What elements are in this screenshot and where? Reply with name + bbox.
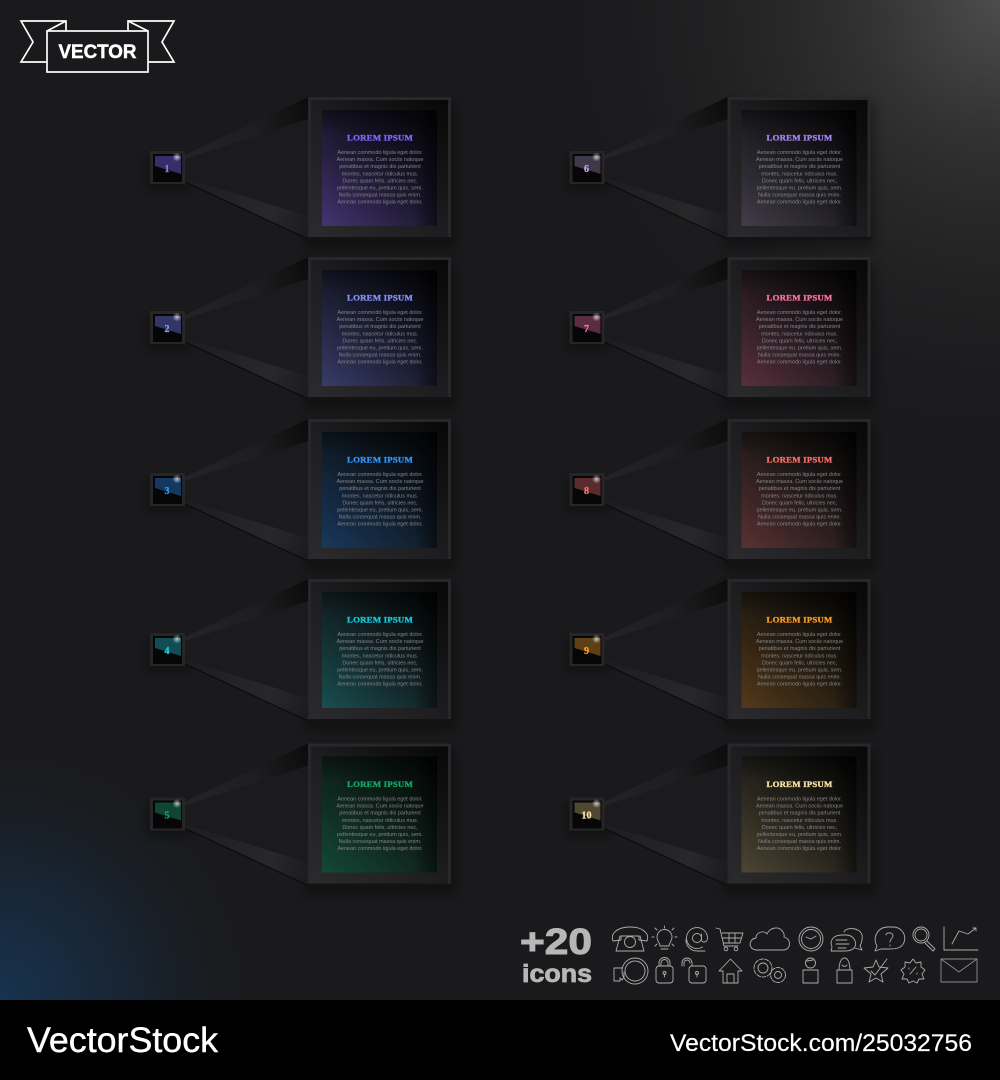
number tile 4	[155, 634, 182, 657]
number tile 3	[155, 474, 182, 497]
badge: vector ribbon	[21, 21, 174, 72]
text block 2: Donec quam felis, ultricies nec,	[342, 338, 418, 344]
text block 10: Nulla consequat massa quis enim.	[758, 839, 841, 845]
text block 4: Nulla consequat massa quis enim.	[339, 675, 422, 681]
text block 6: Aenean commodo ligula eget dolor.	[757, 200, 843, 206]
text block 7: Aenean massa. Cum sociis natoque	[756, 317, 843, 323]
text block 8: montes, nascetur ridiculus mus.	[761, 493, 838, 499]
text block 6: Nulla consequat massa quis enim.	[758, 193, 841, 199]
text block 4: Aenean commodo ligula eget dolor.	[337, 632, 423, 638]
card 3	[146, 419, 456, 571]
card 8	[566, 419, 876, 571]
text block 7: Donec quam felis, ultricies nec,	[762, 338, 838, 344]
icon: question bubble	[875, 927, 905, 951]
icon: envelope	[941, 959, 977, 982]
panel 6	[742, 110, 856, 226]
icon: magnifier	[913, 927, 935, 951]
text block 1: penatibus et magnis dis parturient	[339, 164, 421, 170]
text block 4: Aenean commodo ligula eget dolor.	[337, 682, 423, 688]
number tile 5: 5	[164, 810, 170, 822]
text block 10: Aenean commodo ligula eget dolor.	[757, 846, 843, 852]
text block 4: pellentesque eu, pretium quis, sem.	[337, 668, 423, 674]
text block 3: penatibus et magnis dis parturient	[339, 486, 421, 492]
icon: chat bubbles	[831, 929, 862, 951]
card 2	[146, 257, 456, 409]
text block 2: Nulla consequat massa quis enim.	[339, 353, 422, 359]
icon: open padlock	[682, 958, 706, 983]
footer brand: VectorStock	[27, 1021, 219, 1060]
text block 1: montes, nascetur ridiculus mus.	[342, 171, 419, 177]
text block 10: Aenean massa. Cum sociis natoque	[756, 804, 843, 810]
badge: vector ribbon: VECTOR	[58, 41, 136, 63]
card 6	[566, 97, 876, 249]
number tile 7	[574, 312, 601, 335]
text block 5: Donec quam felis, ultricies nec,	[342, 825, 418, 831]
icon: padlock	[656, 958, 673, 983]
text block 5: Aenean commodo ligula eget dolor.	[337, 846, 423, 852]
panel 7	[742, 270, 856, 386]
text block 5: montes, nascetur ridiculus mus.	[342, 818, 419, 824]
text block 9: Donec quam felis, ultricies nec,	[762, 660, 838, 666]
number tile 5	[155, 799, 182, 822]
number tile 10: 10	[582, 810, 592, 822]
number tile 8: 8	[584, 486, 589, 497]
card 4	[146, 579, 456, 731]
number tile 6	[574, 152, 601, 175]
text block 1: pellentesque eu, pretium quis, sem.	[337, 186, 423, 192]
panel 9	[742, 592, 856, 708]
text block 2: penatibus et magnis dis parturient	[339, 324, 421, 330]
text block 2: pellentesque eu, pretium quis, sem.	[337, 346, 423, 352]
number tile 6: 6	[584, 164, 589, 175]
text block 9: Aenean massa. Cum sociis natoque	[756, 639, 843, 645]
text block 8: pellentesque eu, pretium quis, sem.	[757, 508, 843, 514]
text block 5: Nulla consequat massa quis enim.	[339, 839, 422, 845]
icon: clock	[799, 927, 823, 951]
text block 4: montes, nascetur ridiculus mus.	[342, 653, 419, 659]
text block 7: penatibus et magnis dis parturient	[759, 324, 841, 330]
number tile 7: 7	[584, 324, 589, 335]
icon: woman	[837, 958, 852, 983]
text block 9: penatibus et magnis dis parturient	[759, 646, 841, 652]
text block 7: Nulla consequat massa quis enim.	[758, 353, 841, 359]
text block 3: montes, nascetur ridiculus mus.	[342, 493, 419, 499]
card 7	[566, 257, 876, 409]
text block 10: pellentesque eu, pretium quis, sem.	[757, 832, 843, 838]
text block 9: montes, nascetur ridiculus mus.	[761, 653, 838, 659]
text block 10: Donec quam felis, ultricies nec,	[762, 825, 838, 831]
icon: cloud	[750, 928, 790, 950]
text block 4: penatibus et magnis dis parturient	[339, 646, 421, 652]
text block 6: pellentesque eu, pretium quis, sem.	[757, 186, 843, 192]
icon: man	[803, 958, 818, 983]
text block 9: Nulla consequat massa quis enim.	[758, 675, 841, 681]
icon: percent badge	[901, 959, 925, 983]
text block 6: penatibus et magnis dis parturient	[759, 164, 841, 170]
label: +20 icons	[520, 921, 592, 988]
heading 9: LOREM IPSUM	[767, 614, 833, 624]
panel 3	[322, 432, 437, 548]
text block 8: Aenean massa. Cum sociis natoque	[756, 479, 843, 485]
text block 5: pellentesque eu, pretium quis, sem.	[337, 832, 423, 838]
heading 4: LOREM IPSUM	[347, 614, 413, 624]
text block 1: Nulla consequat massa quis enim.	[339, 193, 422, 199]
icon: telephone	[612, 927, 648, 951]
text block 10: penatibus et magnis dis parturient	[759, 811, 841, 817]
heading 3: LOREM IPSUM	[347, 454, 413, 464]
number tile 2	[155, 312, 182, 335]
card 9	[566, 579, 876, 731]
text block 2: montes, nascetur ridiculus mus.	[342, 331, 419, 337]
number tile 10	[574, 799, 601, 822]
number tile 9: 9	[584, 646, 589, 657]
card 5	[146, 744, 456, 896]
icon: house	[719, 959, 742, 983]
text block 1: Aenean commodo ligula eget dolor.	[337, 200, 423, 206]
footer url: VectorStock.com/25032756	[670, 1030, 972, 1057]
card 10	[566, 744, 876, 896]
text block 7: montes, nascetur ridiculus mus.	[761, 331, 838, 337]
text block 2: Aenean commodo ligula eget dolor.	[337, 310, 423, 316]
icon: line chart	[944, 927, 978, 950]
text block 5: Aenean commodo ligula eget dolor.	[337, 796, 423, 802]
text block 2: Aenean massa. Cum sociis natoque	[336, 317, 424, 323]
heading 8: LOREM IPSUM	[767, 454, 833, 464]
text block 9: Aenean commodo ligula eget dolor.	[757, 682, 843, 688]
panel 5	[322, 756, 437, 872]
panel 2	[322, 270, 437, 386]
text block 7: Aenean commodo ligula eget dolor.	[757, 310, 843, 316]
text block 3: Donec quam felis, ultricies nec,	[342, 500, 418, 506]
footer band	[0, 1000, 1000, 1080]
number tile 8	[574, 474, 601, 497]
text block 6: Aenean commodo ligula eget dolor.	[757, 150, 843, 156]
panel 4	[322, 592, 437, 708]
text block 3: Aenean massa. Cum sociis natoque	[336, 479, 424, 485]
text block 6: Aenean massa. Cum sociis natoque	[756, 157, 843, 163]
text block 6: montes, nascetur ridiculus mus.	[761, 171, 838, 177]
text block 8: Aenean commodo ligula eget dolor.	[757, 522, 843, 528]
text block 1: Donec quam felis, ultricies nec,	[342, 178, 418, 184]
number tile 1	[155, 152, 182, 175]
number tile 2: 2	[164, 324, 170, 335]
icon: key	[614, 958, 648, 984]
heading 6: LOREM IPSUM	[767, 132, 833, 142]
text block 3: Nulla consequat massa quis enim.	[339, 515, 422, 521]
icon: light bulb	[652, 926, 677, 949]
heading 7: LOREM IPSUM	[767, 292, 833, 302]
icon: shopping cart	[716, 928, 743, 951]
heading 1: LOREM IPSUM	[347, 132, 413, 142]
text block 8: Nulla consequat massa quis enim.	[758, 515, 841, 521]
text block 9: Aenean commodo ligula eget dolor.	[757, 632, 843, 638]
panel 8	[742, 432, 856, 548]
number tile 1: 1	[164, 164, 170, 175]
icon: at sign	[686, 928, 708, 951]
text block 1: Aenean commodo ligula eget dolor.	[337, 150, 423, 156]
label: +20 icons: icons	[522, 960, 592, 988]
text block 1: Aenean massa. Cum sociis natoque	[336, 157, 424, 163]
number tile 9	[574, 634, 601, 657]
icon set	[612, 926, 978, 984]
text block 2: Aenean commodo ligula eget dolor.	[337, 360, 423, 366]
heading 10: LOREM IPSUM	[767, 779, 833, 789]
text block 10: montes, nascetur ridiculus mus.	[761, 818, 838, 824]
text block 3: Aenean commodo ligula eget dolor.	[337, 522, 423, 528]
text block 8: Aenean commodo ligula eget dolor.	[757, 472, 843, 478]
text block 9: pellentesque eu, pretium quis, sem.	[757, 668, 843, 674]
text block 10: Aenean commodo ligula eget dolor.	[757, 796, 843, 802]
panel 10	[742, 756, 856, 872]
heading 5: LOREM IPSUM	[347, 779, 413, 789]
text block 3: Aenean commodo ligula eget dolor.	[337, 472, 423, 478]
label: +20 icons: +20	[520, 921, 592, 962]
text block 5: penatibus et magnis dis parturient	[339, 811, 421, 817]
text block 7: pellentesque eu, pretium quis, sem.	[757, 346, 843, 352]
icon: star with check	[864, 959, 888, 982]
number tile 3: 3	[164, 486, 170, 497]
heading 2: LOREM IPSUM	[347, 292, 413, 302]
text block 3: pellentesque eu, pretium quis, sem.	[337, 508, 423, 514]
text block 8: Donec quam felis, ultricies nec,	[762, 500, 838, 506]
text block 4: Aenean massa. Cum sociis natoque	[336, 639, 424, 645]
text block 8: penatibus et magnis dis parturient	[759, 486, 841, 492]
text block 6: Donec quam felis, ultricies nec,	[762, 178, 838, 184]
number tile 4: 4	[164, 646, 170, 657]
text block 7: Aenean commodo ligula eget dolor.	[757, 360, 843, 366]
icon: gears	[754, 959, 786, 982]
card 1	[146, 97, 456, 249]
panel 1	[322, 110, 437, 226]
text block 5: Aenean massa. Cum sociis natoque	[336, 804, 424, 810]
text block 4: Donec quam felis, ultricies nec,	[342, 660, 418, 666]
